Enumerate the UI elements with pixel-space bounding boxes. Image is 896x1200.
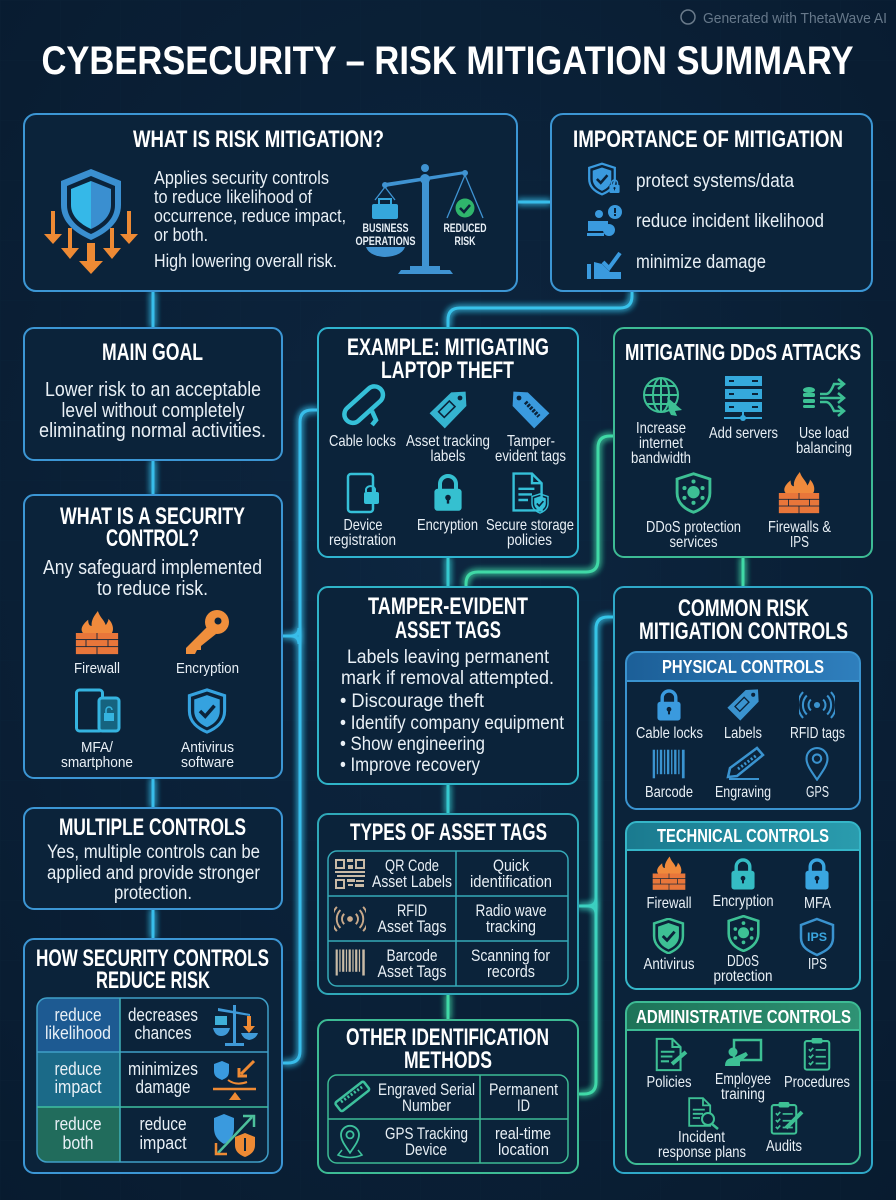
panel: what is a security control <box>24 495 282 778</box>
heading: WHAT IS RISK MITIGATION? <box>133 126 384 153</box>
labels row 1: RFID tags <box>790 725 845 742</box>
icon: key <box>186 610 229 654</box>
icon: balance scale: REDUCED <box>444 223 486 235</box>
row: reduce both: both <box>62 1133 94 1153</box>
bullet list: • Show engineering <box>340 734 485 755</box>
heading: OTHER IDENTIFICATION <box>346 1024 549 1051</box>
labels row 2 <box>329 517 574 549</box>
sub-panel: administrative controls <box>626 1002 860 1164</box>
panel: multiple controls <box>24 808 282 909</box>
labels row 2: Antivirus <box>644 956 694 973</box>
panel: common risk mitigation controls <box>614 587 872 1173</box>
label: mfa <box>61 739 133 771</box>
label: antivirus: Antivirus <box>181 739 234 756</box>
row: barcode: records <box>487 962 535 981</box>
bullet list: • Improve recovery <box>340 755 480 776</box>
row: engraved serial <box>378 1080 558 1115</box>
labels row 1: Use load <box>799 425 849 442</box>
labels row 1: Asset tracking <box>406 433 490 450</box>
body text: occurrence, reduce impact, <box>154 206 346 226</box>
row: barcode <box>378 946 550 981</box>
labels row 2: DDoS <box>727 953 759 970</box>
labels row 2: policies <box>507 532 552 549</box>
icon: tamper tag <box>513 392 549 428</box>
labels row 1 <box>329 433 566 465</box>
labels row 2: Incident <box>678 1129 725 1146</box>
labels row 2: Barcode <box>645 784 693 801</box>
body text: Labels leaving permanent <box>347 647 550 668</box>
item: protect systems/data <box>589 164 794 194</box>
body text <box>341 647 554 689</box>
header: ADMINISTRATIVE CONTROLS <box>636 1006 851 1027</box>
body text <box>43 557 262 600</box>
row: rfid: Radio wave <box>476 901 546 920</box>
labels row 2 <box>644 953 827 985</box>
labels row 1: Policies <box>646 1074 692 1091</box>
labels row 2: IPS <box>808 956 827 973</box>
labels row 1: Tamper- <box>507 433 555 450</box>
heading: WHAT IS A SECURITY <box>60 503 245 530</box>
icon: shield with down arrows <box>44 169 138 274</box>
icon: balance scale: RISK <box>454 236 476 248</box>
labels row 1: Firewall <box>646 895 692 912</box>
body text: applied and provide stronger <box>47 863 261 884</box>
heading: REDUCE RISK <box>96 967 210 994</box>
row: reduce both: impact <box>140 1133 186 1153</box>
labels row 1: Employee <box>715 1071 771 1088</box>
icon: employee training <box>725 1040 761 1066</box>
table <box>328 851 568 986</box>
heading: TAMPER-EVIDENT <box>368 593 528 620</box>
body text: High lowering overall risk. <box>154 251 337 271</box>
row: reduce impact: impact <box>54 1077 102 1097</box>
heading <box>36 945 269 994</box>
item: reduce incident likelihood: reduce incident likelihood <box>636 211 824 232</box>
row: engraved serial: ID <box>517 1096 530 1115</box>
icon: balance scale <box>356 164 486 274</box>
icon: small scale <box>213 1005 258 1046</box>
labels row 2: Secure storage <box>486 517 574 534</box>
labels row 2: Firewalls & <box>768 519 831 536</box>
panel: example laptop theft <box>318 328 578 557</box>
labels row 1: Labels <box>724 725 762 742</box>
row: gps tracking: Device <box>405 1140 447 1159</box>
icon: audits <box>772 1102 802 1134</box>
labels row 1: internet <box>639 435 683 452</box>
heading: CONTROL? <box>106 525 199 552</box>
labels row 1: Cable locks <box>329 433 396 450</box>
label: firewall: Firewall <box>74 660 120 677</box>
labels row 1 <box>636 725 845 742</box>
icon: ips shield: IPS <box>807 930 827 944</box>
panel: how security controls reduce risk <box>24 939 282 1173</box>
row: gps tracking <box>385 1124 551 1159</box>
labels row 2 <box>646 519 831 551</box>
heading <box>639 595 848 645</box>
heading <box>60 503 245 552</box>
row: reduce likelihood: chances <box>134 1023 192 1043</box>
labels row 1: evident tags <box>495 448 566 465</box>
icon: gps pin <box>806 748 828 780</box>
bullet list <box>340 691 565 776</box>
header: TECHNICAL CONTROLS <box>657 825 829 846</box>
label: antivirus: software <box>181 754 234 771</box>
icon: ips shield <box>801 919 833 955</box>
body text: mark if removal attempted. <box>341 668 554 689</box>
item: reduce incident likelihood <box>587 205 824 236</box>
icon: encryption lock <box>731 860 755 889</box>
icon: lock <box>657 691 681 720</box>
heading <box>368 593 528 644</box>
row: engraved serial: Engraved Serial <box>378 1080 475 1099</box>
icon: policies <box>657 1039 686 1070</box>
labels row 1: bandwidth <box>631 450 691 467</box>
body text: eliminating normal activities. <box>39 420 266 442</box>
labels row 2 <box>645 784 829 801</box>
icon: procedures <box>805 1038 829 1070</box>
icon: rfid <box>798 692 836 718</box>
labels row 1 <box>646 893 831 912</box>
labels row 2: services <box>670 534 718 551</box>
panel: what is risk mitigation <box>24 114 517 291</box>
labels row 1: Encryption <box>712 893 774 910</box>
icon: incident response <box>689 1098 718 1129</box>
icon: rfid <box>332 907 368 931</box>
heading: TYPES OF ASSET TAGS <box>350 819 547 846</box>
icon: qr code <box>335 859 365 889</box>
icon: secure storage document <box>514 474 548 513</box>
row: rfid: Asset Tags <box>378 917 446 936</box>
icon: engraved ruler <box>335 1081 370 1112</box>
body text <box>154 168 346 271</box>
panel: mitigating ddos attacks <box>614 328 872 557</box>
icon: gps pin <box>338 1126 362 1158</box>
labels row 1: Cable locks <box>636 725 703 742</box>
row: reduce both: reduce <box>54 1114 102 1134</box>
heading: EXAMPLE: MITIGATING <box>347 334 549 361</box>
body text: level without completely <box>62 400 244 422</box>
heading <box>347 334 549 384</box>
icon: label tag <box>727 689 759 721</box>
body text <box>39 379 266 442</box>
panel: types of asset tags <box>318 814 578 994</box>
icon: device registration <box>348 474 379 512</box>
icon: balance scale: BUSINESS <box>362 223 409 235</box>
labels row 2 <box>658 1129 802 1161</box>
panel: tamper-evident asset tags <box>318 587 578 784</box>
row: rfid <box>378 901 546 936</box>
row: reduce likelihood: reduce <box>54 1005 102 1025</box>
row: reduce impact: minimizes <box>128 1059 198 1079</box>
row: qr code: QR Code <box>385 856 439 875</box>
item: protect systems/data: protect systems/data <box>636 171 794 192</box>
row: reduce impact: reduce <box>54 1059 102 1079</box>
label: antivirus <box>181 739 234 771</box>
item: minimize damage <box>587 252 766 279</box>
icon: balance scale: OPERATIONS <box>356 236 416 248</box>
icon: minimized damage <box>213 1061 256 1100</box>
body text: Any safeguard implemented <box>43 557 262 579</box>
row: barcode: Scanning for <box>471 946 550 965</box>
row: barcode: Barcode <box>386 946 438 965</box>
icon: globe with cursor <box>644 378 682 416</box>
heading: COMMON RISK <box>678 595 809 622</box>
row: gps tracking: location <box>498 1140 549 1159</box>
icon: reduce both <box>214 1114 255 1157</box>
heading <box>346 1024 549 1074</box>
icon: antivirus shield <box>189 690 225 732</box>
heading: MAIN GOAL <box>102 339 203 366</box>
labels row 1: Add servers <box>709 425 778 442</box>
body text: or both. <box>154 225 208 245</box>
icon: servers <box>724 376 762 421</box>
icon: asset tag <box>430 392 466 428</box>
body text: Lower risk to an acceptable <box>45 379 261 401</box>
heading: LAPTOP THEFT <box>381 357 514 384</box>
label: mfa: smartphone <box>61 754 133 771</box>
icon: ddos shield <box>677 474 710 512</box>
labels row 2: Audits <box>766 1138 802 1155</box>
body text: to reduce risk. <box>97 578 208 600</box>
row: reduce likelihood: likelihood <box>45 1023 111 1043</box>
icon: encryption lock <box>434 476 462 511</box>
labels row 2: DDoS protection <box>646 519 741 536</box>
icon: load balancing <box>803 379 844 416</box>
body text: Applies security controls <box>154 168 329 188</box>
labels row 2: Encryption <box>417 517 478 534</box>
panel: importance of mitigation <box>551 114 872 291</box>
table <box>37 998 268 1162</box>
heading: HOW SECURITY CONTROLS <box>36 945 269 972</box>
heading: METHODS <box>404 1047 492 1074</box>
row: reduce impact: damage <box>136 1077 190 1097</box>
icon: mfa lock <box>805 860 829 889</box>
label: mfa: MFA/ <box>81 739 114 756</box>
icon: cable lock <box>341 383 386 426</box>
row: reduce both: reduce <box>140 1114 186 1134</box>
labels row 1: balancing <box>796 440 852 457</box>
header: PHYSICAL CONTROLS <box>662 656 824 677</box>
icon: barcode <box>336 949 365 976</box>
body text: to reduce likelihood of <box>154 187 313 207</box>
labels row 1 <box>631 420 852 467</box>
labels row 2: GPS <box>806 784 829 801</box>
row: qr code: Quick <box>493 856 529 875</box>
row: engraved serial: Number <box>402 1096 451 1115</box>
row: qr code: Asset Labels <box>372 872 452 891</box>
icon: firewall <box>779 472 819 513</box>
labels row 2: Device <box>344 517 383 534</box>
icon: firewall <box>76 611 118 654</box>
labels row 2: protection <box>714 968 772 985</box>
body text: Yes, multiple controls can be <box>47 842 260 863</box>
row: reduce likelihood: decreases <box>128 1005 198 1025</box>
heading: ASSET TAGS <box>395 617 501 644</box>
row: reduce both <box>54 1114 186 1153</box>
item: minimize damage: minimize damage <box>636 252 766 273</box>
body text <box>47 842 261 904</box>
sub-panel: physical controls <box>626 652 860 809</box>
heading: MULTIPLE CONTROLS <box>59 814 246 841</box>
icon: phones <box>76 690 119 731</box>
labels row 2: registration <box>329 532 396 549</box>
labels row 1 <box>646 1071 850 1103</box>
row: rfid: RFID <box>397 901 427 920</box>
bullet list: • Identify company equipment <box>340 713 565 734</box>
connectors <box>153 202 743 1094</box>
label: encryption: Encryption <box>176 660 239 677</box>
row: rfid: tracking <box>486 917 536 936</box>
icon: antivirus shield <box>654 919 683 953</box>
row: qr code: identification <box>470 872 552 891</box>
icon: engraving pen <box>728 748 763 779</box>
row: barcode: Asset Tags <box>378 962 446 981</box>
labels row 1: Increase <box>636 420 686 437</box>
row: engraved serial: Permanent <box>489 1080 558 1099</box>
labels row 1: labels <box>430 448 466 465</box>
row: qr code <box>372 856 552 891</box>
panel: main goal <box>24 328 282 460</box>
bullet list: • Discourage theft <box>340 691 485 712</box>
body text: protection. <box>114 883 192 904</box>
row: reduce likelihood <box>45 1005 198 1043</box>
labels row 1: Procedures <box>784 1074 850 1091</box>
row: reduce impact <box>54 1059 198 1097</box>
row: gps tracking: real-time <box>495 1124 551 1143</box>
sub-panel: technical controls <box>626 822 860 989</box>
icon: barcode <box>653 750 685 778</box>
icon: firewall <box>653 856 685 890</box>
icon: ddos shield <box>729 916 758 951</box>
labels row 2: IPS <box>790 534 809 551</box>
labels row 2: Engraving <box>715 784 771 801</box>
panel: other identification methods <box>318 1020 578 1173</box>
labels row 2: response plans <box>658 1144 746 1161</box>
labels row 1: training <box>721 1086 765 1103</box>
row: gps tracking: GPS Tracking <box>385 1124 468 1143</box>
labels row 1: MFA <box>804 895 831 912</box>
table <box>328 1075 568 1163</box>
